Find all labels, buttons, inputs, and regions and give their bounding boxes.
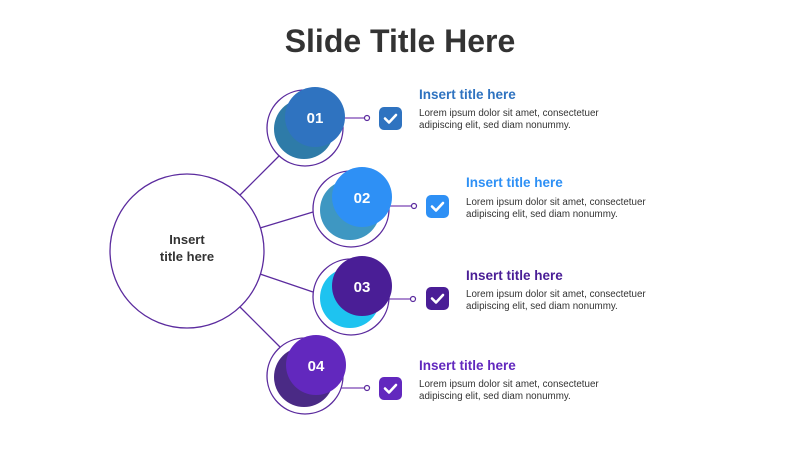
item 04 bbox=[267, 335, 599, 414]
item 04: adipiscing elit, sed diam nonummy. bbox=[419, 391, 571, 402]
item 03 bbox=[313, 256, 646, 335]
title: Slide Title Here bbox=[285, 23, 515, 59]
item 01: 01 bbox=[307, 110, 323, 127]
item 04: Insert title here bbox=[419, 358, 516, 373]
item 01: adipiscing elit, sed diam nonummy. bbox=[419, 120, 571, 131]
item 02: adipiscing elit, sed diam nonummy. bbox=[466, 209, 618, 220]
center circle bbox=[110, 174, 264, 328]
item 03: 03 bbox=[354, 279, 370, 296]
connector lines bbox=[240, 155, 313, 347]
item 02: Lorem ipsum dolor sit amet, consectetuer bbox=[466, 197, 646, 208]
center circle: Insert bbox=[169, 232, 205, 247]
item 03: Lorem ipsum dolor sit amet, consectetuer bbox=[466, 289, 646, 300]
item 02: Insert title here bbox=[466, 175, 563, 190]
item 01: Lorem ipsum dolor sit amet, consectetuer bbox=[419, 108, 599, 119]
item 04: 04 bbox=[308, 358, 325, 375]
item 03: adipiscing elit, sed diam nonummy. bbox=[466, 301, 618, 312]
item 01: Insert title here bbox=[419, 87, 516, 102]
center circle: title here bbox=[160, 249, 214, 264]
item 02: 02 bbox=[354, 190, 370, 207]
item 03: Insert title here bbox=[466, 268, 563, 283]
item 04: Lorem ipsum dolor sit amet, consectetuer bbox=[419, 379, 599, 390]
item 02 bbox=[313, 167, 646, 247]
item 01 bbox=[267, 87, 599, 166]
